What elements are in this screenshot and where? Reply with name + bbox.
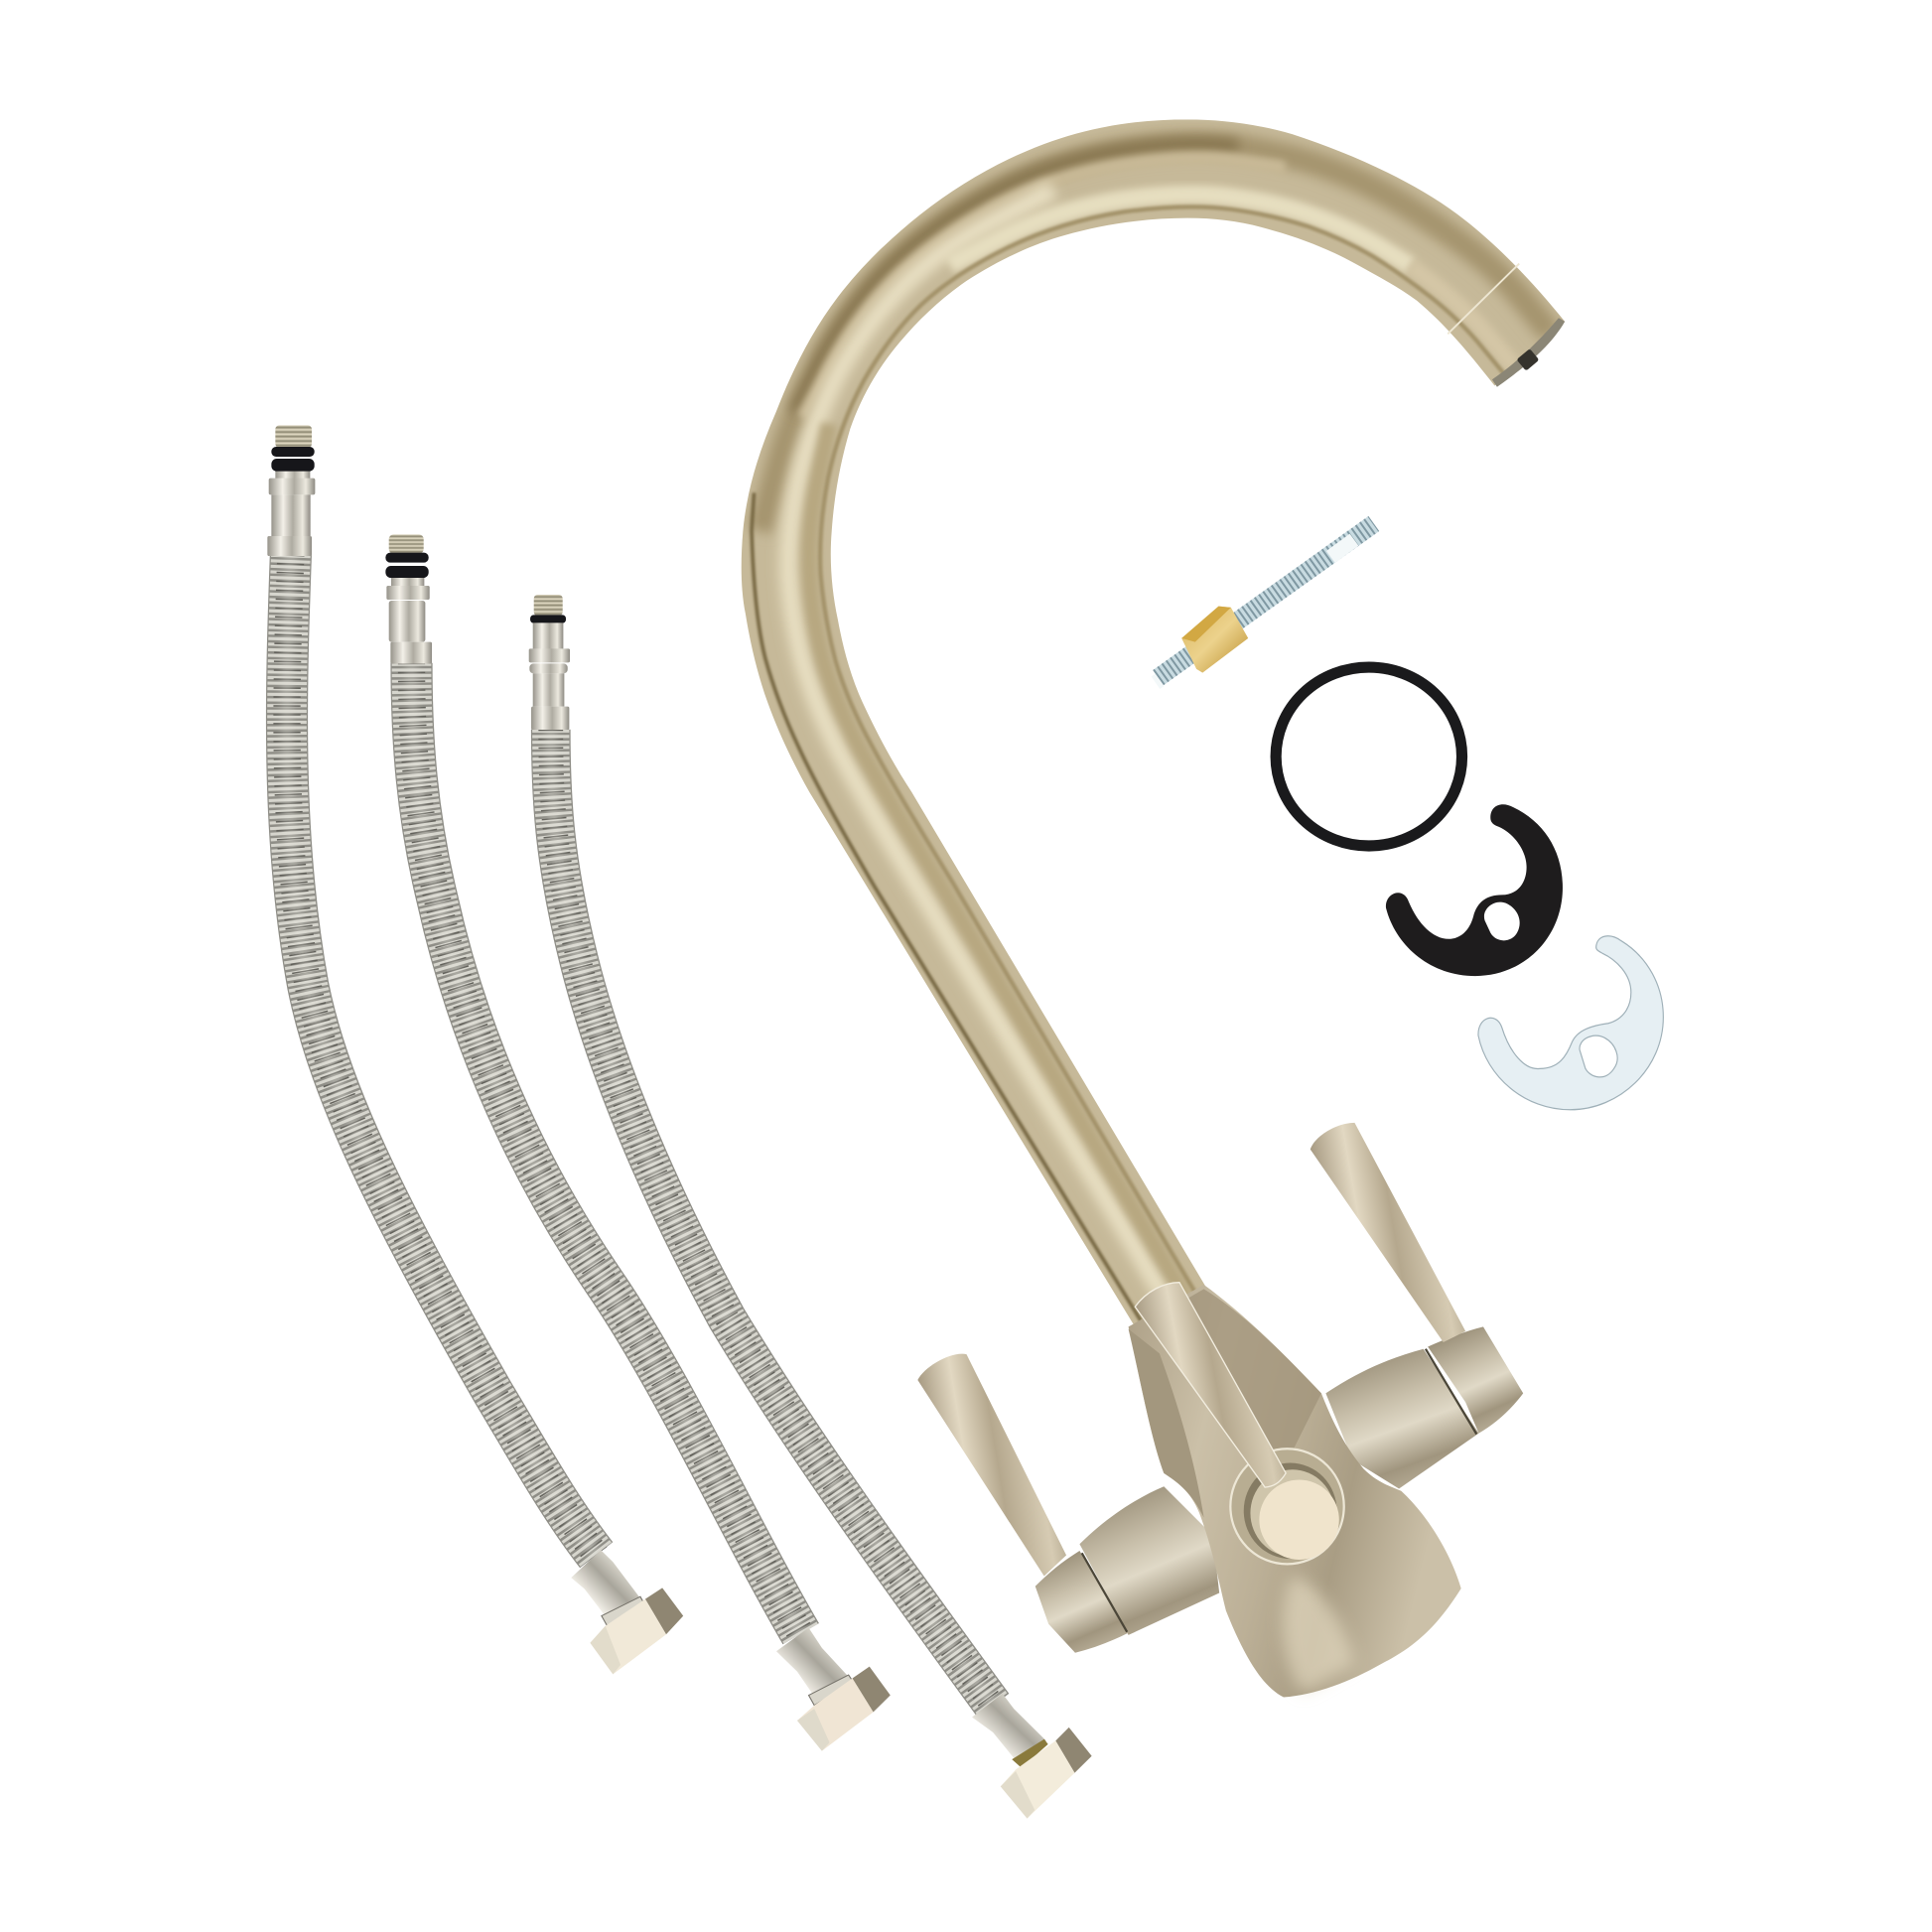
- zinc metal washer: [1478, 936, 1663, 1110]
- black rubber gasket: [1386, 804, 1563, 976]
- hose 1 braided: [287, 554, 597, 1555]
- bottom nuts and sleeves of the hoses: [571, 1550, 1092, 1819]
- tap body: [1129, 1283, 1461, 1697]
- top fittings of the hoses: [267, 425, 570, 730]
- spout: [727, 98, 1589, 1343]
- threaded bolt with brass nut: [1154, 523, 1374, 688]
- centre lever: [1135, 1283, 1286, 1487]
- hose 3 braided: [551, 730, 993, 1706]
- rear cartridges and end caps: [917, 1123, 1523, 1653]
- black rubber ring: [1276, 667, 1462, 846]
- spout seam and aerator: [1448, 264, 1565, 387]
- hose 2 braided: [412, 663, 801, 1634]
- handle pivot and button: [1230, 1449, 1344, 1564]
